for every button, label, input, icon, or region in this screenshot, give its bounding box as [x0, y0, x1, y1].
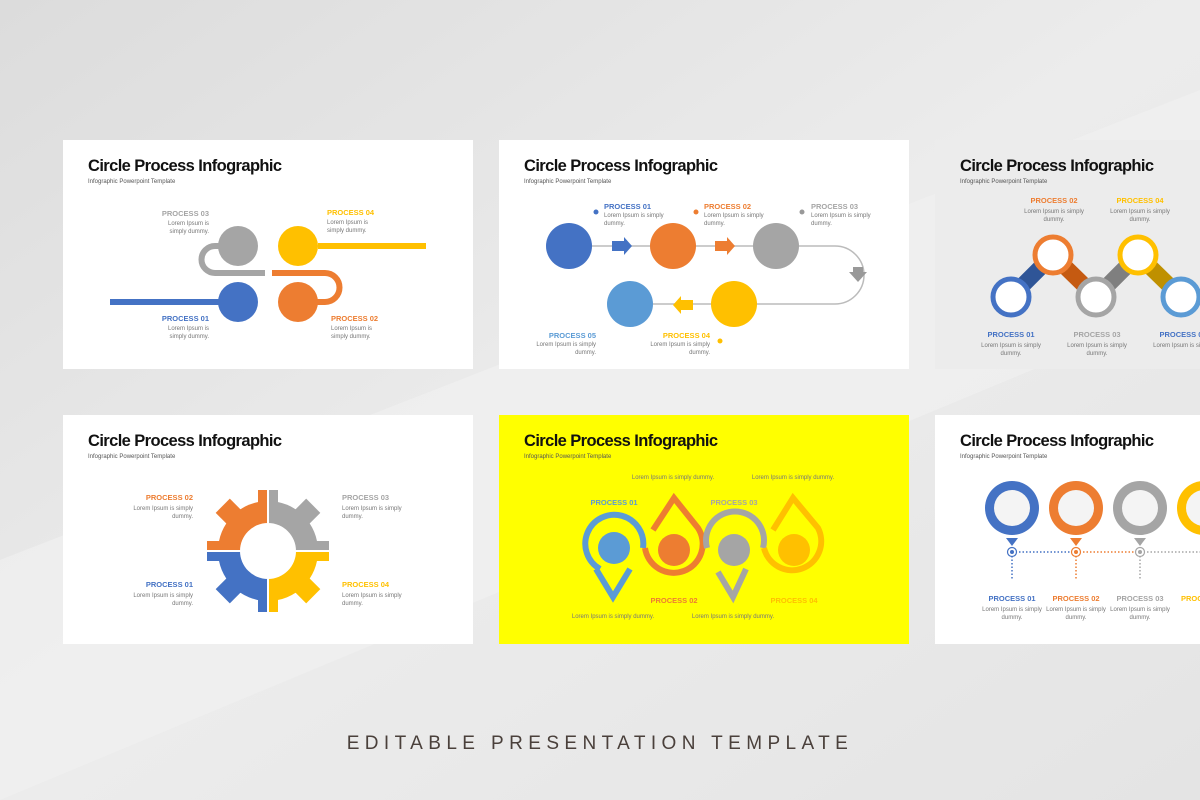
slide 6: pin timeline: Circle Process Infographic — [960, 432, 1154, 450]
slide 3: chain rings: Lorem Ipsum is simply — [1024, 209, 1084, 215]
slide 3: chain rings: PROCESS 01 — [987, 330, 1035, 339]
slide 4: gear: dummy. — [342, 514, 363, 520]
slide 3: chain rings: PROCESS 02 — [1030, 196, 1078, 205]
slide 2: snake process: PROCESS 05 — [549, 331, 596, 340]
slide 4: gear: Lorem Ipsum is simply — [342, 506, 402, 512]
slide 2: snake process: PROCESS 03 — [811, 202, 858, 211]
path lines — [110, 246, 426, 302]
slide 3: chain rings: dummy. — [1130, 217, 1151, 223]
slide 4: gear: dummy. — [172, 601, 193, 607]
slide 5: yellow pins: Infographic Powerpoint Template — [524, 454, 612, 460]
slide 5: yellow pins: PROCESS 02 — [650, 596, 698, 605]
slide 6: pin timeline: dummy. — [1002, 615, 1023, 621]
slide 5: yellow pins: PROCESS 03 — [710, 498, 758, 507]
slide 6: pin timeline: Lorem Ipsum is simply — [1046, 607, 1106, 613]
slide 1: winding path process: simply dummy. — [331, 334, 371, 340]
slide 4: gear: dummy. — [172, 514, 193, 520]
slide 2: snake process: dummy. — [604, 221, 625, 227]
slide 6: pin timeline: Lorem Ipsum is simply — [1110, 607, 1170, 613]
slide 4: gear: Lorem Ipsum is simply — [133, 593, 193, 599]
slide 1: winding path process: Lorem Ipsum is — [331, 326, 372, 332]
slide 1: winding path process: Lorem Ipsum is — [168, 326, 209, 332]
slide 6: pin timeline: PROCESS 02 — [1052, 594, 1100, 603]
slide 3: chain rings: Infographic Powerpoint Template — [960, 179, 1048, 185]
slide 6: pin timeline: dummy. — [1130, 615, 1151, 621]
slide 1: winding path process — [63, 140, 473, 369]
slide 2: snake process: dummy. — [704, 221, 725, 227]
slide 1: winding path process: simply dummy. — [169, 334, 209, 340]
slide 1: winding path process: Circle Process Infographic — [88, 157, 282, 175]
slide 1: winding path process: Lorem Ipsum is — [327, 220, 368, 226]
slide 5: yellow pins: Circle Process Infographic — [524, 432, 718, 450]
slide 6: pin timeline: Infographic Powerpoint Template — [960, 454, 1048, 460]
slide 2: snake process: Lorem Ipsum is simply — [704, 213, 764, 219]
slide 3: chain rings: PROCESS 04 — [1116, 196, 1164, 205]
slide 1: winding path process: simply dummy. — [169, 229, 209, 235]
slide 4: gear: PROCESS 02 — [146, 493, 193, 502]
footer caption: EDITABLE PRESENTATION TEMPLATE — [347, 733, 853, 754]
slide 5: yellow pins: Lorem Ipsum is simply dummy. — [752, 475, 834, 481]
slide 4: gear: Circle Process Infographic — [88, 432, 282, 450]
slide 1: winding path process: simply dummy. — [327, 228, 367, 234]
slide 2: snake process: PROCESS 01 — [604, 202, 651, 211]
slide 5: yellow pins: PROCESS 04 — [770, 596, 818, 605]
slide 1: winding path process: PROCESS 04 — [327, 208, 375, 217]
slide 4: gear: PROCESS 03 — [342, 493, 389, 502]
slide 2: snake process: Lorem Ipsum is simply — [811, 213, 871, 219]
slide 6: pin timeline — [935, 415, 1200, 644]
slide 4: gear: Infographic Powerpoint Template — [88, 454, 176, 460]
slide 2: snake process: Infographic Powerpoint Template — [524, 179, 612, 185]
slide 2: snake process — [499, 140, 909, 369]
slide 2: snake process: dummy. — [575, 350, 596, 356]
slide 4: gear: PROCESS 04 — [342, 580, 390, 589]
slide 1: winding path process: PROCESS 01 — [162, 314, 209, 323]
slide 2: snake process: Lorem Ipsum is simply — [536, 342, 596, 348]
slide 4: gear: Lorem Ipsum is simply — [133, 506, 193, 512]
slide 6: pin timeline: Lorem Ipsum is simply — [982, 607, 1042, 613]
slide 3: chain rings: Lorem Ipsum is simply — [1067, 343, 1127, 349]
slide 5: yellow pins: Lorem Ipsum is simply dummy. — [632, 475, 714, 481]
slide 1: winding path process: Lorem Ipsum is — [168, 221, 209, 227]
slide 5: yellow pins: PROCESS 01 — [590, 498, 638, 507]
slide 2: snake process: dummy. — [811, 221, 832, 227]
labels: PROCESS 03 — [162, 209, 209, 218]
slide 3: chain rings — [935, 140, 1200, 369]
slide 2: snake process: dummy. — [689, 350, 710, 356]
slide 4: gear — [63, 415, 473, 644]
slide 2: snake process: Lorem Ipsum is simply — [650, 342, 710, 348]
slide 3: chain rings: dummy. — [1001, 351, 1022, 357]
slide 5: yellow pins: Lorem Ipsum is simply dummy. — [572, 614, 654, 620]
slide 4: gear: dummy. — [342, 601, 363, 607]
slide 6: pin timeline: dummy. — [1066, 615, 1087, 621]
slide 4: gear: PROCESS 01 — [146, 580, 193, 589]
slide 3: chain rings: Lorem Ipsum is simply — [981, 343, 1041, 349]
slide 6: pin timeline: PROCESS 01 — [988, 594, 1036, 603]
slide 5: yellow pins: Lorem Ipsum is simply dummy. — [692, 614, 774, 620]
slide 3: chain rings: dummy. — [1044, 217, 1065, 223]
slide 3: chain rings: Circle Process Infographic — [960, 157, 1154, 175]
slide 2: snake process: Lorem Ipsum is simply — [604, 213, 664, 219]
slide 6: pin timeline: PROCESS 03 — [1116, 594, 1164, 603]
circles — [218, 226, 258, 266]
slide 2: snake process: Circle Process Infographic — [524, 157, 718, 175]
slide 3: chain rings: Lorem Ipsum is simply — [1110, 209, 1170, 215]
slide 3: chain rings: dummy. — [1087, 351, 1108, 357]
slide 2: snake process: PROCESS 02 — [704, 202, 751, 211]
slide 4: gear: Lorem Ipsum is simply — [342, 593, 402, 599]
slide 1: winding path process: Infographic Powerpoint Template — [88, 179, 176, 185]
slide 1: winding path process: PROCESS 02 — [331, 314, 378, 323]
slide 3: chain rings: PROCESS 03 — [1073, 330, 1121, 339]
slide 5: yellow pins — [499, 415, 909, 644]
slide 2: snake process: PROCESS 04 — [663, 331, 711, 340]
